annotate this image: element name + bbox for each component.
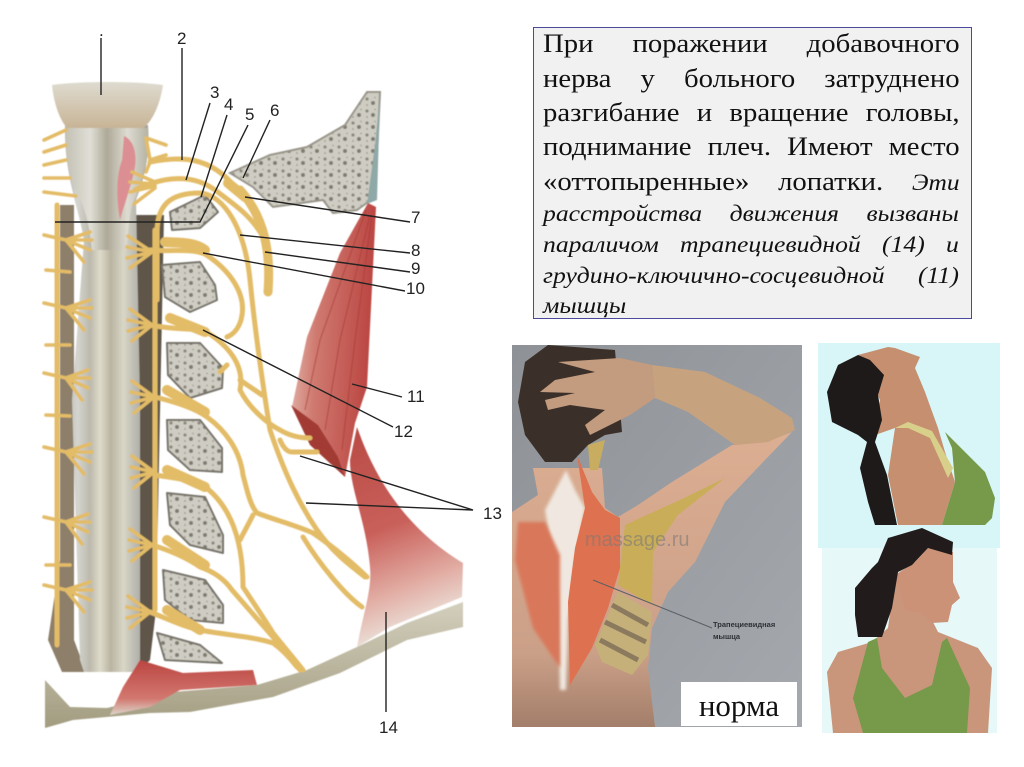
number labels: 3: [210, 83, 219, 102]
panel: spine and nerves illustration: [44, 21, 502, 737]
text block: consequences of accessory nerve lesion: расстройства движения вызваны: [543, 201, 959, 226]
sternocleidomastoid muscle: [292, 203, 376, 477]
pink nucleus: [117, 136, 136, 220]
trapezius muscle: [350, 427, 463, 647]
spinal cord: [65, 125, 148, 672]
trapezius muscle left: [515, 522, 560, 668]
hand: [540, 358, 655, 435]
number labels: 2: [177, 29, 186, 48]
nerve root fans: right side: [127, 138, 166, 628]
torso and upper arm: [512, 432, 792, 727]
text block: consequences of accessory nerve lesion: грудино-ключично-сосцевидной (11): [543, 263, 959, 288]
green top: [853, 638, 970, 733]
number labels: .: [99, 21, 104, 40]
clavicle: [45, 602, 463, 728]
number labels: 14: [379, 718, 398, 737]
caption: trapezius: Трапециевидная: [713, 620, 775, 629]
forearm: [652, 365, 795, 445]
mastoid membrane: [367, 95, 380, 204]
occipital bone: [230, 92, 380, 213]
neck insertion: [588, 440, 605, 470]
nerve root fans: left side: [44, 130, 92, 612]
photo: head in neutral position: [822, 528, 997, 733]
number labels: 5: [245, 105, 254, 124]
photo: back with trapezius muscle: [512, 345, 802, 727]
hair and ponytail: [855, 528, 953, 637]
upper cord columns: [66, 128, 148, 250]
green top: [942, 432, 995, 525]
watermark: massage.ru: [585, 529, 690, 551]
number labels: 8: [411, 241, 420, 260]
hair: [827, 355, 897, 525]
number labels: 6: [270, 101, 279, 120]
number labels: 7: [411, 208, 420, 227]
left paravertebral shadow: [48, 205, 86, 672]
shoulders and neck: [827, 575, 992, 733]
text block: consequences of accessory nerve lesion: разгибание и вращение головы,: [543, 98, 960, 127]
lower muscle: [110, 660, 257, 715]
text block: consequences of accessory nerve lesion: При поражении добавочного: [543, 29, 960, 58]
yellow strap: [895, 422, 953, 478]
number labels: 11: [407, 387, 425, 406]
scapula: [618, 478, 725, 605]
vertical trunks: [152, 230, 158, 610]
hair: [518, 345, 622, 462]
text block: consequences of accessory nerve lesion: параличом трапециевидной (14) и: [543, 232, 959, 257]
yellow nerves: [44, 130, 367, 670]
ganglia: [165, 183, 245, 630]
accessory nerve thick end: [240, 190, 269, 292]
number labels: 12: [394, 422, 413, 441]
spine white stripe: [545, 470, 585, 690]
text block: consequences of accessory nerve lesion: [533, 27, 972, 319]
face: [895, 548, 960, 623]
text block: consequences of accessory nerve lesion: поднимание плеч. Имеют место: [543, 132, 960, 161]
caption: trapezius: мышца: [713, 632, 741, 641]
text block: consequences of accessory nerve lesion: «оттопыренные» лопатки. Эти: [543, 167, 960, 196]
caption: norm: норма: [699, 688, 779, 723]
text block: consequences of accessory nerve lesion: мышцы: [543, 293, 626, 318]
caption: norm: [681, 682, 797, 726]
medulla cap: [52, 82, 163, 128]
number labels: 4: [224, 95, 233, 114]
number labels: 13: [483, 504, 502, 523]
muscle fibres: [305, 210, 372, 450]
leader lines: [55, 38, 473, 712]
number labels: [99, 21, 502, 737]
photo: head tilted back: [818, 343, 1000, 548]
right paravertebral shadow: [136, 215, 164, 672]
number labels: 10: [406, 279, 425, 298]
muscle cut end: [291, 405, 345, 477]
face and neck: [858, 347, 955, 525]
pointer line: [593, 580, 712, 628]
trapezius muscle right: [568, 455, 620, 685]
text block: consequences of accessory nerve lesion: нерва у больного затруднено: [543, 64, 960, 93]
vertebrae: [157, 195, 223, 663]
ribs: [595, 592, 652, 675]
number labels: 9: [411, 259, 420, 278]
